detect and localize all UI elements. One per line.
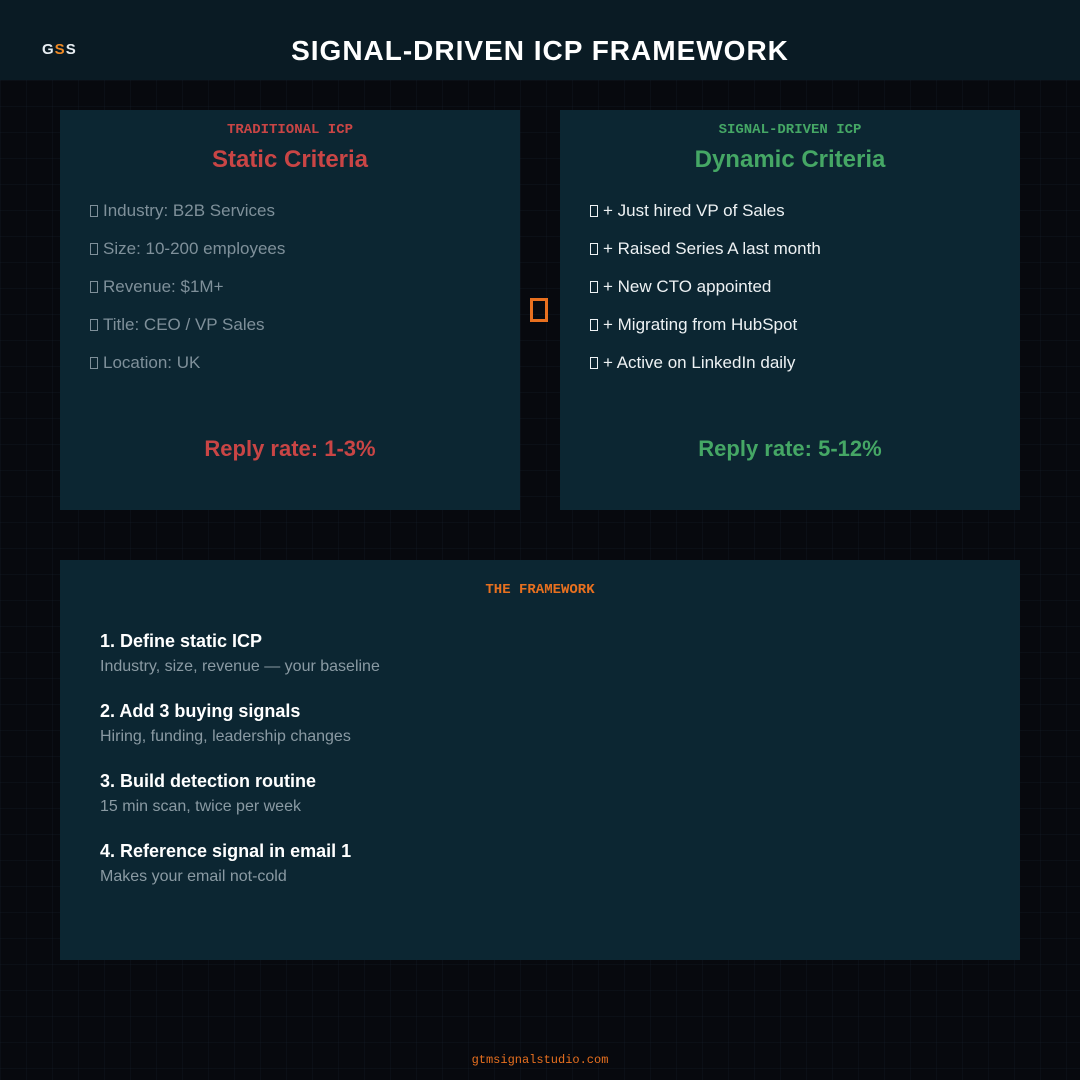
step 3 [100, 771, 316, 815]
kicker: traditional: TRADITIONAL ICP [227, 122, 353, 138]
heading: static criteria: Static Criteria [212, 146, 368, 173]
reply rate: signal: Reply rate: 5-12% [698, 436, 882, 461]
heading: dynamic criteria: Dynamic Criteria [695, 146, 885, 173]
list: static criteria: Location: UK [103, 353, 200, 372]
step 1: 1. Define static ICP [100, 631, 262, 651]
panel: signal-driven ICP [560, 110, 1020, 510]
kicker: framework: THE FRAMEWORK [485, 582, 595, 598]
step 4: Makes your email not-cold [100, 868, 287, 885]
step 4: 4. Reference signal in email 1 [100, 841, 351, 861]
step 3: 3. Build detection routine [100, 771, 316, 791]
icon: arrow placeholder [530, 298, 548, 322]
list: dynamic criteria: + New CTO appointed [603, 277, 771, 296]
title: SIGNAL-DRIVEN ICP FRAMEWORK [291, 35, 789, 66]
list: dynamic criteria: + Just hired VP of Sales [603, 201, 785, 220]
reply rate: traditional: Reply rate: 1-3% [204, 436, 376, 461]
header bar [0, 0, 1080, 80]
list: static criteria: Size: 10-200 employees [103, 239, 285, 258]
step 1: Industry, size, revenue — your baseline [100, 658, 380, 675]
list: static criteria: Title: CEO / VP Sales [103, 315, 265, 334]
panel: traditional ICP [60, 110, 520, 510]
logo: GSS [42, 41, 77, 58]
list: static criteria: Revenue: $1M+ [103, 277, 224, 296]
panel: the framework [60, 560, 1020, 960]
list: dynamic criteria: + Migrating from HubSpot [603, 315, 797, 334]
step 2: 2. Add 3 buying signals [100, 701, 300, 721]
footer url: gtmsignalstudio.com [472, 1053, 608, 1067]
list: static criteria: Industry: B2B Services [103, 201, 275, 220]
step 2 [100, 701, 351, 745]
list: static criteria [90, 201, 285, 372]
step 4 [100, 841, 351, 885]
step 2: Hiring, funding, leadership changes [100, 728, 351, 745]
list: dynamic criteria: + Raised Series A last month [603, 239, 821, 258]
step 1 [100, 631, 380, 675]
list: dynamic criteria [590, 201, 821, 372]
kicker: signal-driven: SIGNAL-DRIVEN ICP [719, 122, 861, 138]
list: dynamic criteria: + Active on LinkedIn daily [603, 353, 795, 372]
step 3: 15 min scan, twice per week [100, 798, 301, 815]
